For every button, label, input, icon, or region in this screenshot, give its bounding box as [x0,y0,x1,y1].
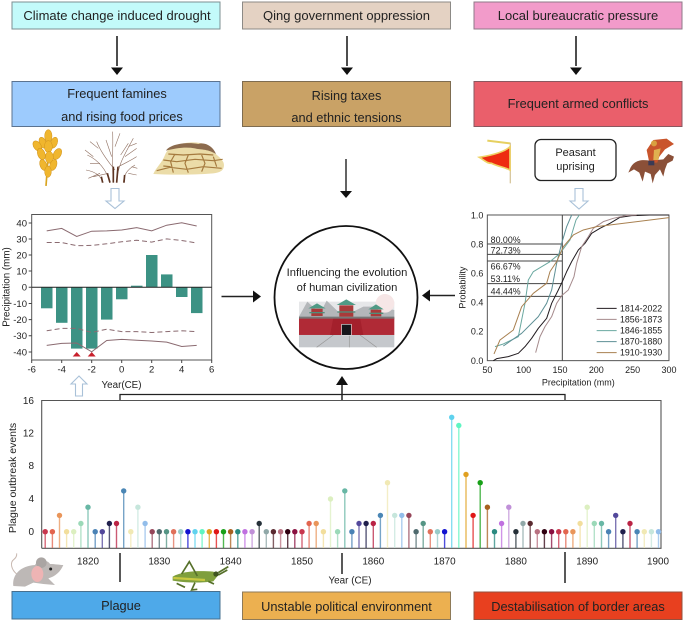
arrow: precipitation chart to circle [222,290,261,302]
x axis title: Year (CE) [328,576,372,586]
axis titles: Precipitation (mm) [2,247,12,327]
box: frequent armed conflicts [474,82,682,126]
y axis labels: 30 [16,234,27,246]
y axis labels: 16 [23,396,34,407]
y axis labels [471,210,483,366]
box: frequent famines [12,82,220,126]
box: climate change induced drought [12,2,220,29]
arrow: hollow down to precipitation chart [106,188,124,208]
box: destabilisation of border areas: Destabilisation of border areas [491,599,665,614]
x axis labels: 1840 [220,556,242,568]
probability curves [493,215,669,361]
y axis labels: 0.8 [471,239,483,249]
y axis labels: -40 [13,348,27,358]
chart frame [487,215,669,361]
y axis labels: 0.0 [471,356,483,366]
icon: wheat [31,130,64,186]
connector: bracket from lower causes to circle [120,376,565,400]
box: frequent famines: Frequent famines [67,86,167,101]
lollipop stems [45,417,658,548]
x axis labels: -6 [27,364,36,376]
circle: influencing the evolution of human civilization: of human civilization [297,282,397,294]
icon: grasshopper [173,562,228,590]
y axis labels: 8 [28,461,34,472]
x axis labels: 1850 [291,556,313,568]
x axis labels: 0 [119,364,124,376]
axis titles: Year(CE) [102,380,141,391]
box: rising taxes [242,82,450,126]
x axis labels: 150 [552,365,567,375]
chart frame [42,400,661,548]
box: peasant uprising: Peasant [555,147,596,159]
arrow: probability chart to circle [422,290,455,302]
box: plague: Plague [101,598,141,613]
arrow: drought to famines [111,36,123,75]
box: frequent famines: and rising food prices [61,109,183,124]
percentage labels: 80.00% [491,235,521,245]
x axis labels: 1900 [647,556,669,568]
icon: cracked earth [153,142,224,175]
icon: horse rider [628,139,674,183]
x axis labels: 1860 [362,556,385,568]
reference lines [487,215,562,361]
y axis labels: 0 [28,527,34,538]
legend [597,303,662,358]
percentage labels [491,235,521,297]
y axis labels: 0 [22,282,27,294]
chart: plague outbreak lollipop chart [7,396,669,586]
box: frequent armed conflicts: Frequent armed conflicts [508,96,648,111]
icon: mouse [11,553,63,587]
box: rising taxes: and ethnic tensions [291,110,402,125]
box: rising taxes: Rising taxes [312,88,381,103]
x axis labels: 100 [516,365,531,375]
box: climate change induced drought: Climate change induced drought [23,8,211,23]
box: Qing government oppression: Qing government oppression [263,8,430,23]
x axis labels: 1890 [576,556,599,568]
y axis labels: -30 [13,331,27,342]
icon: palace [299,294,394,347]
x axis labels: 50 [482,365,492,375]
legend: 1846-1855 [620,326,662,336]
y axis labels: -20 [13,315,27,326]
x axis labels [27,364,214,376]
box: peasant uprising [535,140,616,180]
x axis labels [77,556,669,568]
circle: influencing the evolution of human civilization [274,226,418,369]
legend: 1870-1880 [620,337,662,347]
x axis labels: 2 [149,364,154,376]
x axis labels: 4 [179,364,184,376]
y axis labels: 0.4 [471,298,483,308]
axis titles [457,266,615,387]
chart frame [32,214,212,360]
box: peasant uprising: uprising [556,161,595,173]
confidence lines [47,223,197,352]
y axis labels: 0.2 [471,327,483,337]
arrow: hollow up from plague chart [71,376,87,396]
box: unstable political environment: Unstable political environment [261,599,432,614]
x axis labels [482,365,676,375]
y axis labels: 10 [16,266,27,278]
y axis labels [23,396,34,538]
y axis labels [13,218,27,358]
chart: probability curves [457,210,676,387]
x axis labels: -4 [57,364,66,376]
y axis labels: 40 [16,218,27,230]
x axis labels: 1880 [505,556,527,568]
x axis labels: 300 [661,365,676,375]
y axis labels: 0.6 [471,268,483,278]
box: unstable political environment [242,592,450,620]
percentage labels: 53.11% [491,274,520,284]
percentage labels: 66.67% [491,261,521,271]
axis ticks [29,223,212,363]
box: destabilisation of border areas [474,592,682,620]
y axis labels: 12 [23,428,34,440]
x axis labels: 1830 [148,556,171,568]
y axis labels: -10 [13,299,27,310]
percentage labels: 44.44% [491,287,521,297]
lollipop heads [42,415,661,534]
x axis labels: 250 [625,365,640,375]
legend: 1814-2022 [620,303,662,313]
drought markers [73,352,96,356]
arrow: oppression to taxes [341,36,353,75]
dividers: period markers [120,552,565,583]
icon: bare tree [85,132,137,183]
box: local bureaucratic pressure [474,2,682,29]
axis titles: Precipitation (mm) [542,377,615,387]
chart: precipitation bar chart [2,214,214,391]
box: Qing government oppression [242,2,450,29]
box: plague [12,592,220,619]
x axis labels: 1820 [77,556,99,568]
x axis labels: 200 [589,365,604,375]
y axis labels: 20 [16,250,27,262]
y axis labels: 4 [28,494,34,505]
percentage labels: 72.73% [491,245,521,255]
bars [41,255,202,349]
x axis labels: 6 [209,364,214,376]
x axis labels: -2 [87,364,96,376]
legend: 1910-1930 [620,348,662,358]
arrow: taxes to circle [340,159,352,198]
circle: influencing the evolution of human civilization: Influencing the evolution [287,267,407,279]
icon: red flag [479,141,510,183]
axis titles [2,247,141,391]
legend: 1856-1873 [620,314,662,324]
x axis labels: 1870 [434,556,456,568]
y axis title: Plague outbreak events [7,423,19,533]
axis titles: Probability [457,266,467,309]
box: local bureaucratic pressure: Local bureaucratic pressure [498,8,658,23]
arrow: hollow down to probability chart [570,188,588,209]
zero line [32,286,212,288]
y axis labels: 1.0 [471,210,483,220]
arrow: bureaucratic pressure to conflicts [570,36,582,75]
